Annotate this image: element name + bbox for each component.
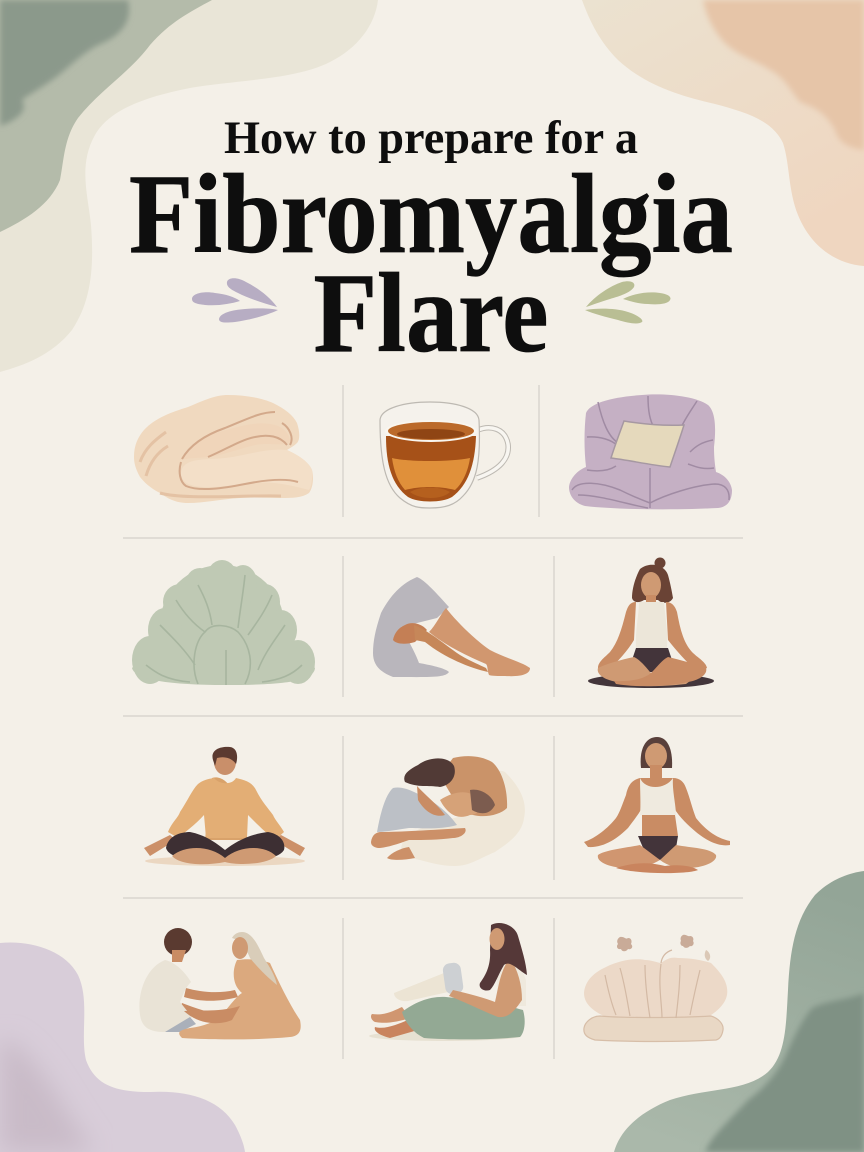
icon: lavender armchair bbox=[569, 394, 732, 509]
icon: green leafy mound bbox=[132, 560, 315, 685]
icon: cup of tea bbox=[380, 402, 508, 508]
icon: lavender leaves bbox=[192, 278, 278, 323]
icon: folded blanket bbox=[134, 395, 313, 503]
icon: two people in support pose bbox=[139, 928, 301, 1039]
icon: two people cuddling on cushion bbox=[371, 756, 525, 866]
title bbox=[129, 112, 733, 376]
background blob: top left bbox=[0, 0, 378, 372]
icon: woman reading bbox=[369, 923, 527, 1041]
icon: green leaves bbox=[585, 281, 671, 323]
title line: intro: How to prepare for a bbox=[224, 112, 638, 164]
background blob: top right bbox=[582, 0, 864, 266]
icon: seated man in sweater bbox=[144, 747, 305, 866]
icon: seated woman with bob bbox=[584, 737, 730, 873]
icon: seated woman with bun bbox=[588, 558, 714, 688]
title line: Flare: Flare bbox=[314, 251, 548, 376]
title line: Fibromyalgia: Fibromyalgia bbox=[129, 152, 733, 277]
grid dividers bbox=[123, 385, 743, 1059]
background blob: bottom right bbox=[614, 871, 864, 1152]
icon: gathered pillow with petals bbox=[584, 935, 727, 1042]
background blob: bottom left bbox=[0, 942, 245, 1152]
icon: legs and skirt bbox=[373, 577, 530, 677]
